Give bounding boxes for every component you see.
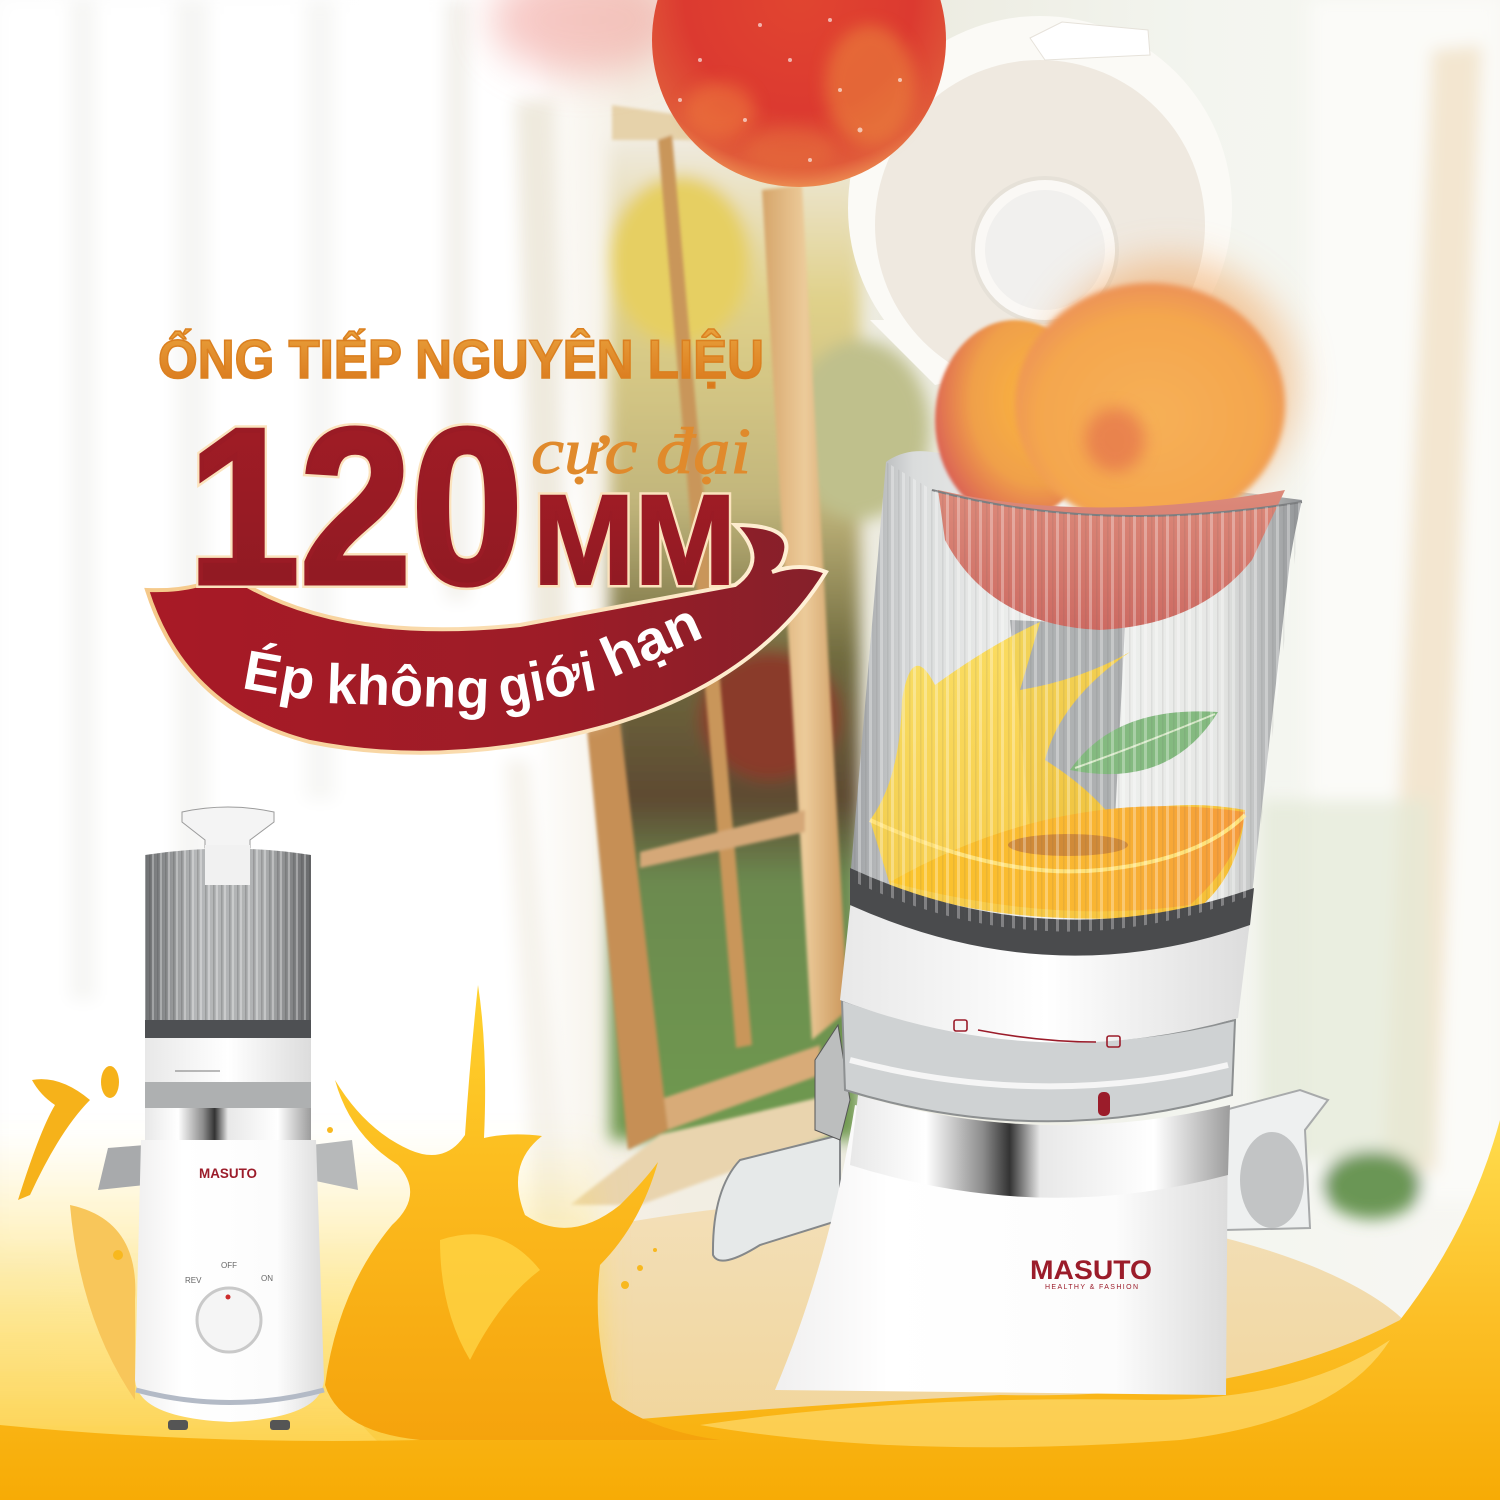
dark internal: [1010, 620, 1125, 830]
banner text: giới: [492, 639, 600, 720]
logo: MASUTO: [1030, 1255, 1152, 1285]
side spout left: [713, 1025, 850, 1261]
white band: [840, 890, 1252, 1043]
small juicer: REV: [185, 1276, 202, 1285]
curtain on the left: [0, 0, 600, 1250]
juicer lid open: [848, 16, 1232, 400]
big number: MM: [533, 469, 736, 612]
big number: [188, 383, 751, 631]
big number: 120: [188, 383, 523, 631]
small logo: MASUTO: [199, 1165, 257, 1181]
logo: HEALTHY & FASHION: [1045, 1284, 1138, 1291]
big number: cực đại: [531, 415, 751, 488]
banner text: Ép: [239, 638, 320, 712]
chrome ring: [850, 1095, 1230, 1198]
banner swoosh: [147, 525, 826, 753]
peach in the chute: [932, 260, 1302, 630]
window frame: [570, 105, 848, 1205]
lock icons: [954, 1020, 1120, 1047]
juice splash left: [18, 985, 720, 1440]
big number: MM: [533, 469, 736, 612]
transparent jar: [850, 451, 1302, 932]
small juicer: [98, 807, 358, 1430]
banner text: không: [326, 652, 491, 721]
right window blurred: [1260, 0, 1500, 1219]
clear collar: [842, 1000, 1235, 1121]
small chrome: [145, 1108, 311, 1140]
dial: [197, 1288, 261, 1352]
peach top: [490, 0, 946, 187]
banner text: [239, 590, 710, 721]
yellow juice floor: [0, 1120, 1500, 1500]
small band: [145, 1038, 311, 1082]
line: ống tiếp nguyên liệu: ỐNG TIẾP NGUYÊN LIỆU: [158, 328, 764, 390]
large juicer: [713, 451, 1328, 1395]
banner text: hạn: [591, 590, 710, 689]
juice splash in jar: [870, 622, 1245, 919]
small juicer: ON: [261, 1274, 273, 1283]
small body: [135, 1140, 324, 1422]
table top: [345, 1200, 1435, 1500]
big number: 120: [188, 383, 523, 631]
dial labels: OFF: [221, 1261, 237, 1270]
leaf: [1070, 711, 1218, 774]
motor base: [775, 1105, 1228, 1395]
garden seen through the window: [610, 140, 930, 1140]
small spouts: [98, 1145, 145, 1190]
jar ribs overlay: [850, 462, 1302, 932]
small jar: [145, 848, 311, 1020]
pusher knob: [182, 807, 274, 848]
side spout right: [1225, 1090, 1328, 1230]
dark ring at jar base: [850, 868, 1254, 956]
